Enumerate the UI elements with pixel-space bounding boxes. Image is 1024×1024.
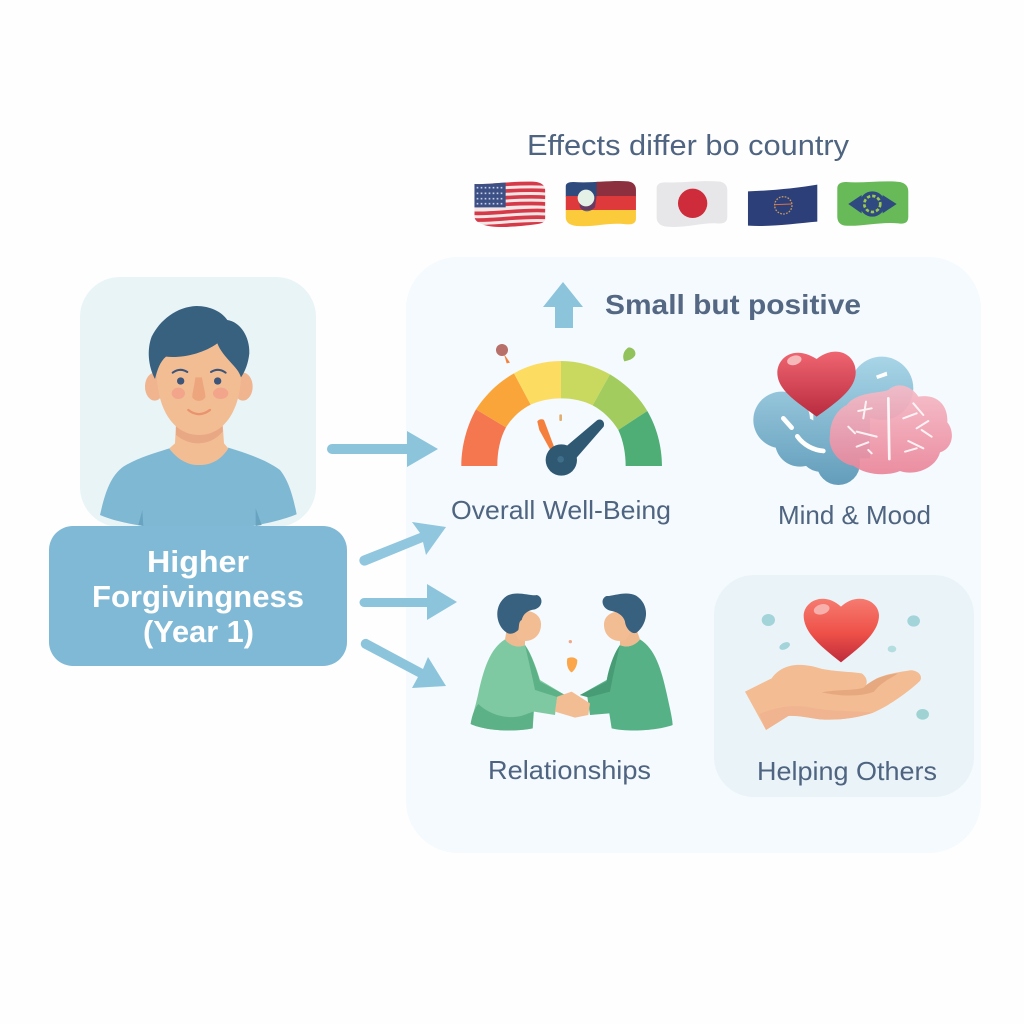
arrow: up — [543, 282, 583, 328]
flag: black red gold with emblem — [565, 180, 637, 228]
flag: Japan — [657, 181, 727, 227]
box text line 1: Higher — [147, 544, 249, 579]
icon: gauge — [461, 344, 662, 476]
flags row — [474, 181, 908, 227]
label: mind and mood: Mind & Mood — [778, 500, 931, 530]
arrow: middle — [360, 584, 457, 620]
icon: heart and brain — [753, 352, 952, 485]
box text line 2: Forgivingness — [92, 579, 304, 614]
icon: person — [100, 306, 297, 526]
panel: helping others — [714, 575, 974, 797]
box: higher forgivingness — [49, 526, 347, 666]
icon: handshake people — [471, 593, 673, 730]
heading: effects differ by country: Effects differ bo country — [527, 130, 850, 162]
label: helping others: Helping Others — [757, 756, 937, 786]
flag: USA — [474, 181, 546, 227]
arrow: lower diagonal — [361, 639, 446, 688]
box text line 3: (Year 1) — [143, 614, 254, 649]
heading: small but positive: Small but positive — [605, 289, 861, 320]
panel: outcomes — [406, 257, 981, 853]
label: relationships: Relationships — [488, 755, 651, 785]
panel: person card — [80, 277, 316, 527]
flag: Brazil-like green — [837, 181, 908, 226]
flag: blue with emblem — [748, 185, 817, 226]
label: overall well-being: Overall Well-Being — [451, 495, 671, 525]
arrow: to overall well-being — [327, 431, 438, 467]
icon: hand and heart — [745, 599, 929, 730]
arrow: upper diagonal — [359, 522, 446, 566]
